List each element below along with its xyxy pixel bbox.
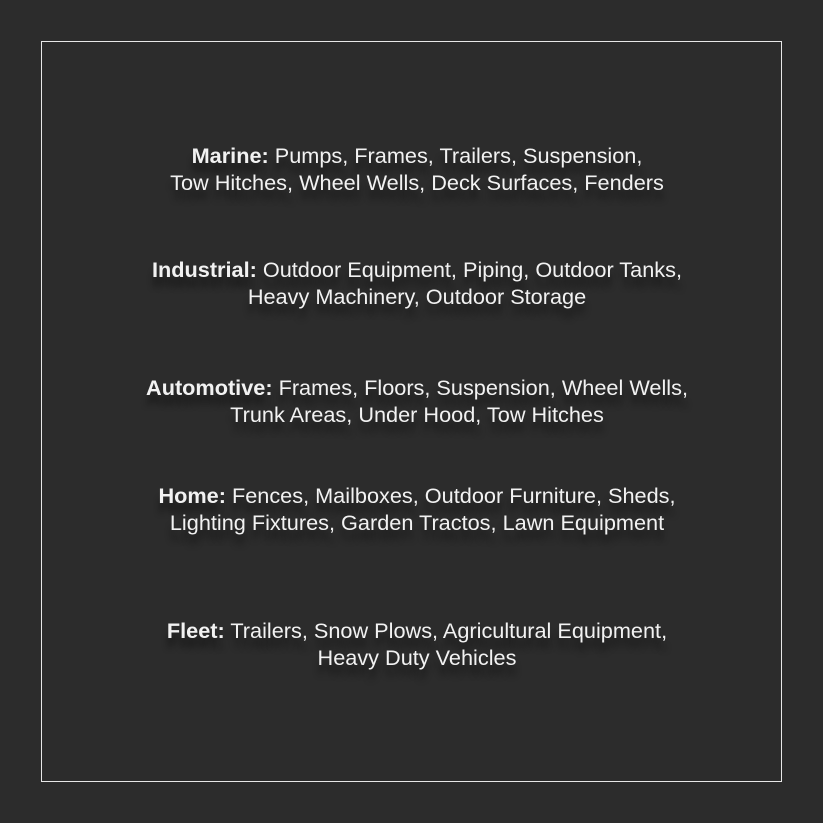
text block: industrial: Heavy Machinery, Outdoor Storage [248,284,586,309]
text block: automotive: Automotive: Frames, Floors, Suspension, Wheel Wells, [146,375,688,400]
text block: industrial [152,257,682,312]
text block: automotive: Trunk Areas, Under Hood, Tow Hitches [230,402,604,427]
text block: marine [170,143,664,198]
text block: home: Home: Fences, Mailboxes, Outdoor Furniture, Sheds, [158,483,676,508]
text block: home [158,483,676,538]
text block: home: Lighting Fixtures, Garden Tractos, Lawn Equipment [170,510,664,535]
text block: industrial: Industrial: Outdoor Equipment, Piping, Outdoor Tanks, [152,257,682,282]
text block: fleet [167,618,667,672]
text block: automotive [146,375,688,429]
text block: marine: Marine: Pumps, Frames, Trailers, Suspension, [192,143,642,168]
text block: fleet: Heavy Duty Vehicles [318,645,516,670]
text block: fleet: Fleet: Trailers, Snow Plows, Agricultural Equipment, [167,618,667,643]
text block: marine: Tow Hitches, Wheel Wells, Deck Surfaces, Fenders [170,170,664,195]
